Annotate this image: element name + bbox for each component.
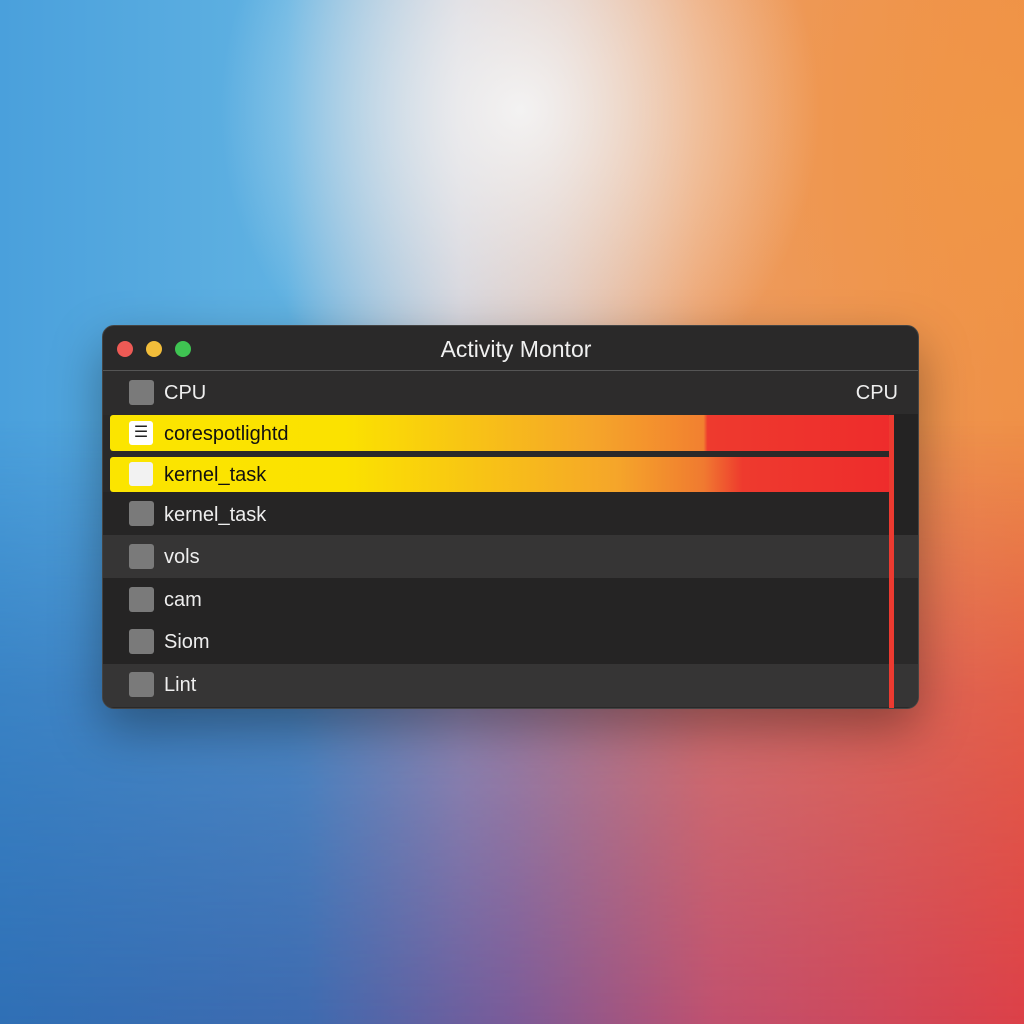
bar: kernel_task: kernel_task	[164, 464, 266, 486]
red vertical line	[889, 415, 894, 710]
window: activity monitor: vols	[164, 546, 200, 568]
window: activity monitor	[102, 325, 919, 709]
bar: corespotlightd: ☰	[134, 424, 148, 441]
bar: kernel_task	[110, 457, 891, 492]
window: activity monitor: Lint	[164, 674, 196, 696]
bar: corespotlightd: corespotlightd	[164, 423, 289, 445]
header row: CPU	[164, 382, 206, 404]
rows background	[103, 492, 893, 535]
title: Activity Montor	[441, 336, 591, 362]
window: activity monitor: cam	[164, 589, 202, 611]
header row: CPU	[856, 382, 898, 404]
window: activity monitor: kernel_task	[164, 504, 266, 526]
list rows	[129, 501, 266, 526]
right column	[894, 414, 920, 535]
bar: corespotlightd	[110, 415, 891, 451]
traffic lights	[117, 341, 191, 357]
window: activity monitor: Siom	[164, 631, 210, 653]
header row	[103, 370, 920, 415]
